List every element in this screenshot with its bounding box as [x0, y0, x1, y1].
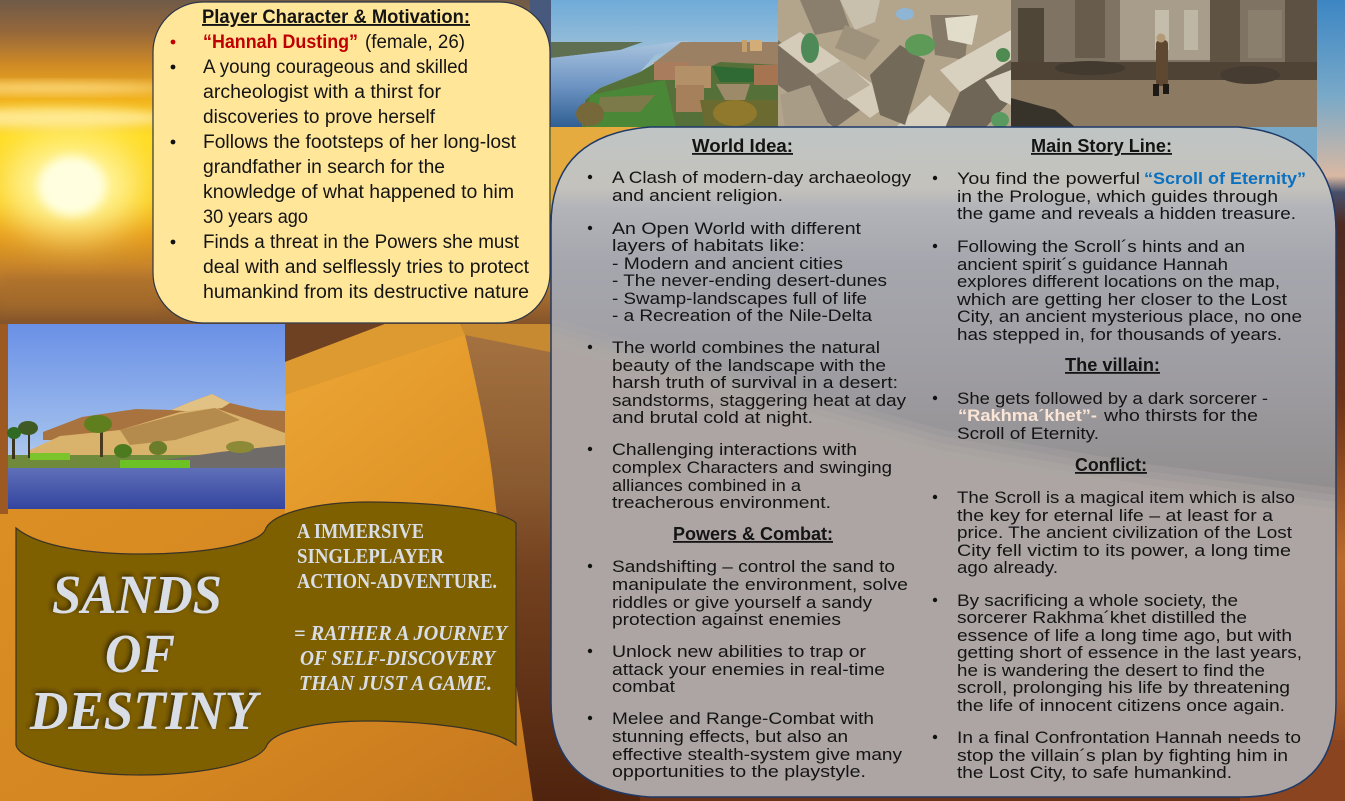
bullet: scroll as key for eternal life	[933, 488, 1295, 577]
bullet: clash of archaeology and religion	[588, 168, 912, 205]
bullet: challenging interactions: treacherous environment.	[612, 493, 831, 512]
bullet: beauty and survival: harsh truth of survival in a desert:	[612, 373, 898, 392]
bullet: sandshifting: protection against enemies	[612, 610, 841, 629]
bullet: open world habitats: - The never-ending desert-dunes	[612, 271, 887, 290]
bullet: grandfather footsteps: Follows the footsteps of her long-lost	[203, 132, 517, 153]
bullet: sacrifice by sorcerer: scroll, prolonging his life by threatening	[957, 678, 1290, 697]
heading: player character: Player Character & Motivation:	[202, 7, 470, 28]
heading: main story line: Main Story Line:	[1031, 136, 1172, 156]
bullet: dark sorcerer: Scroll of Eternity.	[957, 424, 1099, 443]
bullet: beauty and survival: beauty of the landscape with the	[612, 356, 886, 375]
bullet: scroll as key for eternal life: City fell victim to its power, a long time	[957, 541, 1291, 560]
tagline: genre	[297, 519, 497, 593]
bullet: melee and range combat: opportunities to the playstyle.	[612, 762, 866, 781]
title: Sands of Destiny: OF	[105, 623, 175, 684]
background: sunset sky with sun	[0, 0, 560, 325]
bullet: challenging interactions: alliances combined in a	[612, 476, 802, 495]
bullet: threat in the powers	[171, 232, 530, 303]
bullet: Hannah Dusting: “Hannah Dusting”	[203, 32, 358, 53]
banner: scroll with game title	[16, 502, 516, 775]
bullet: scroll hints and lost city	[933, 237, 1302, 344]
bullet: sandshifting: Sandshifting – control the sand to	[612, 557, 895, 576]
heading: world idea: World Idea:	[692, 136, 793, 156]
bullet: sacrifice by sorcerer: By sacrificing a whole society, the	[957, 591, 1238, 610]
bullet: new abilities	[588, 642, 885, 696]
bullet: grandfather footsteps: grandfather in search for the	[203, 157, 445, 178]
bullet: open world habitats	[588, 219, 887, 325]
bullet: scroll as key for eternal life: the key for eternal life – at least for a	[957, 506, 1274, 525]
bullet: final confrontation: stop the villain´s plan by fighting him in	[957, 746, 1288, 765]
bullet: scroll as key for eternal life: The Scroll is a magical item which is also	[957, 488, 1295, 507]
bullet: grandfather footsteps: 30 years ago	[203, 207, 308, 228]
tagline: journey of self-discovery: = RATHER A JOURNEY	[294, 621, 509, 645]
bullet: scroll hints and lost city: has stepped in, for thousands of years.	[957, 325, 1282, 344]
bullet: open world habitats: - Swamp-landscapes full of life	[612, 289, 867, 308]
bullet: Hannah Dusting: (female, 26)	[365, 32, 465, 53]
heading: powers and combat: Powers & Combat:	[673, 524, 833, 544]
photo: woman walking through temple ruins	[1011, 0, 1317, 127]
bullet: challenging interactions: complex Characters and swinging	[612, 458, 892, 477]
bullet: open world habitats: - a Recreation of the Nile-Delta	[612, 306, 873, 325]
bullet: sandshifting	[588, 557, 908, 629]
bullet: sacrifice by sorcerer: getting short of essence in the last years,	[957, 643, 1302, 662]
tagline: journey of self-discovery	[294, 621, 509, 695]
column: main story line	[933, 136, 1306, 782]
bullet: scroll hints and lost city: Following the Scroll´s hints and an	[957, 237, 1245, 256]
bullet: young archeologist: A young courageous and skilled	[203, 57, 468, 78]
bullet: final confrontation: the Lost City, to safe humankind.	[957, 763, 1232, 782]
bullet: scroll of eternity: “Scroll of Eternity”	[1144, 169, 1306, 188]
photo: Nile river with dunes	[7, 324, 285, 509]
panel: player character and motivation	[153, 2, 550, 323]
bullet: dark sorcerer: “Rakhma´khet”-	[958, 406, 1097, 425]
bullet: open world habitats: An Open World with different	[612, 219, 861, 238]
bullet: beauty and survival	[588, 338, 907, 427]
bullet: scroll of eternity: the game and reveals a hidden treasure.	[957, 204, 1296, 223]
bullet: scroll of eternity	[933, 169, 1306, 223]
bullet: young archeologist: archeologist with a thirst for	[203, 82, 442, 103]
bullet: sacrifice by sorcerer: essence of life a long time ago, but with	[957, 626, 1292, 645]
bullet: final confrontation	[933, 728, 1301, 782]
bullet: scroll hints and lost city: explores different locations on the map,	[957, 272, 1280, 291]
bullet: beauty and survival: and brutal cold at night.	[612, 408, 813, 427]
bullet: scroll hints and lost city: which are getting her closer to the Lost	[956, 290, 1287, 309]
photo: Nile town aerial view	[551, 0, 779, 127]
bullet: clash of archaeology and religion: and ancient religion.	[612, 186, 783, 205]
bullet: melee and range combat: stunning effects, but also an	[612, 727, 848, 746]
bullet: open world habitats: - Modern and ancient cities	[612, 254, 843, 273]
bullet: scroll hints and lost city: City, an ancient mysterious place, no one	[957, 307, 1302, 326]
bullet: new abilities: attack your enemies in real-time	[612, 660, 885, 679]
column: world idea	[588, 136, 912, 781]
tagline: genre: A IMMERSIVE	[297, 519, 424, 543]
bullet: threat in the powers: Finds a threat in the Powers she must	[203, 232, 520, 253]
bullet: threat in the powers: humankind from its destructive nature	[203, 282, 529, 303]
bullet: beauty and survival: The world combines the natural	[612, 338, 880, 357]
bullet: sacrifice by sorcerer: sorcerer Rakhma´khet distilled the	[957, 608, 1247, 627]
bullet: sandshifting: manipulate the environment, solve	[612, 575, 908, 594]
bullet: scroll hints and lost city: ancient spirit´s guidance Hannah	[957, 255, 1228, 274]
tagline: journey of self-discovery: THAN JUST A GAME.	[299, 671, 492, 695]
title: Sands of Destiny: SANDS	[52, 564, 222, 625]
bullet: young archeologist: discoveries to prove herself	[203, 107, 436, 128]
title: Sands of Destiny: DESTINY	[29, 680, 261, 741]
background: golden sky behind panel corner	[551, 127, 655, 235]
bullet: scroll as key for eternal life: price. The ancient civilization of the Lost	[957, 523, 1292, 542]
bullet: challenging interactions	[588, 440, 892, 512]
bullet: sacrifice by sorcerer: he is wandering the desert to find the	[957, 661, 1265, 680]
title: Sands of Destiny	[29, 564, 261, 741]
bullet: beauty and survival: sandstorms, staggering heat at day	[612, 391, 907, 410]
photo: ruined city illustration	[778, 0, 1011, 128]
bullet: grandfather footsteps: knowledge of what happened to him	[203, 182, 514, 203]
bullet: dark sorcerer: who thirsts for the	[1103, 406, 1258, 425]
bullet: sacrifice by sorcerer	[933, 591, 1302, 715]
tagline: genre: SINGLEPLAYER	[297, 544, 445, 568]
bullet: melee and range combat	[588, 709, 903, 781]
tagline: genre: ACTION-ADVENTURE.	[297, 569, 497, 593]
bullet: scroll of eternity: in the Prologue, which guides through	[957, 187, 1278, 206]
bullet: new abilities: combat	[612, 677, 675, 696]
bullet: Hannah Dusting	[171, 32, 465, 53]
bullet: grandfather footsteps	[171, 132, 517, 228]
bullet: melee and range combat: Melee and Range-Combat with	[612, 709, 874, 728]
bullet: threat in the powers: deal with and selflessly tries to protect	[203, 257, 530, 278]
bullet: scroll of eternity: You find the powerful	[957, 169, 1140, 188]
heading: conflict: Conflict:	[1075, 455, 1147, 475]
bullet: scroll as key for eternal life: ago already.	[957, 558, 1058, 577]
bullet: sacrifice by sorcerer: the life of innocent citizens once again.	[957, 696, 1285, 715]
bullet: clash of archaeology and religion: A Clash of modern-day archaeology	[612, 168, 912, 187]
tagline: journey of self-discovery: OF SELF-DISCOVERY	[300, 646, 497, 670]
bullet: final confrontation: In a final Confrontation Hannah needs to	[957, 728, 1301, 747]
bullet: challenging interactions: Challenging interactions with	[612, 440, 857, 459]
bullet: melee and range combat: effective stealth-system give many	[612, 745, 903, 764]
bullet: dark sorcerer	[933, 389, 1268, 443]
bullet: young archeologist	[171, 57, 468, 128]
background: right desert edge	[1225, 127, 1345, 801]
bullet: dark sorcerer: She gets followed by a dark sorcerer -	[957, 389, 1268, 408]
heading: the villain: The villain:	[1065, 355, 1160, 375]
background: central sand dune	[285, 324, 600, 801]
bullet: sandshifting: riddles or give yourself a sandy	[612, 593, 873, 612]
panel: world and story overview	[551, 127, 1336, 797]
bullet: open world habitats: layers of habitats like:	[612, 236, 805, 255]
bullet: new abilities: Unlock new abilities to trap or	[612, 642, 866, 661]
background: dune shadow flank	[465, 335, 600, 801]
